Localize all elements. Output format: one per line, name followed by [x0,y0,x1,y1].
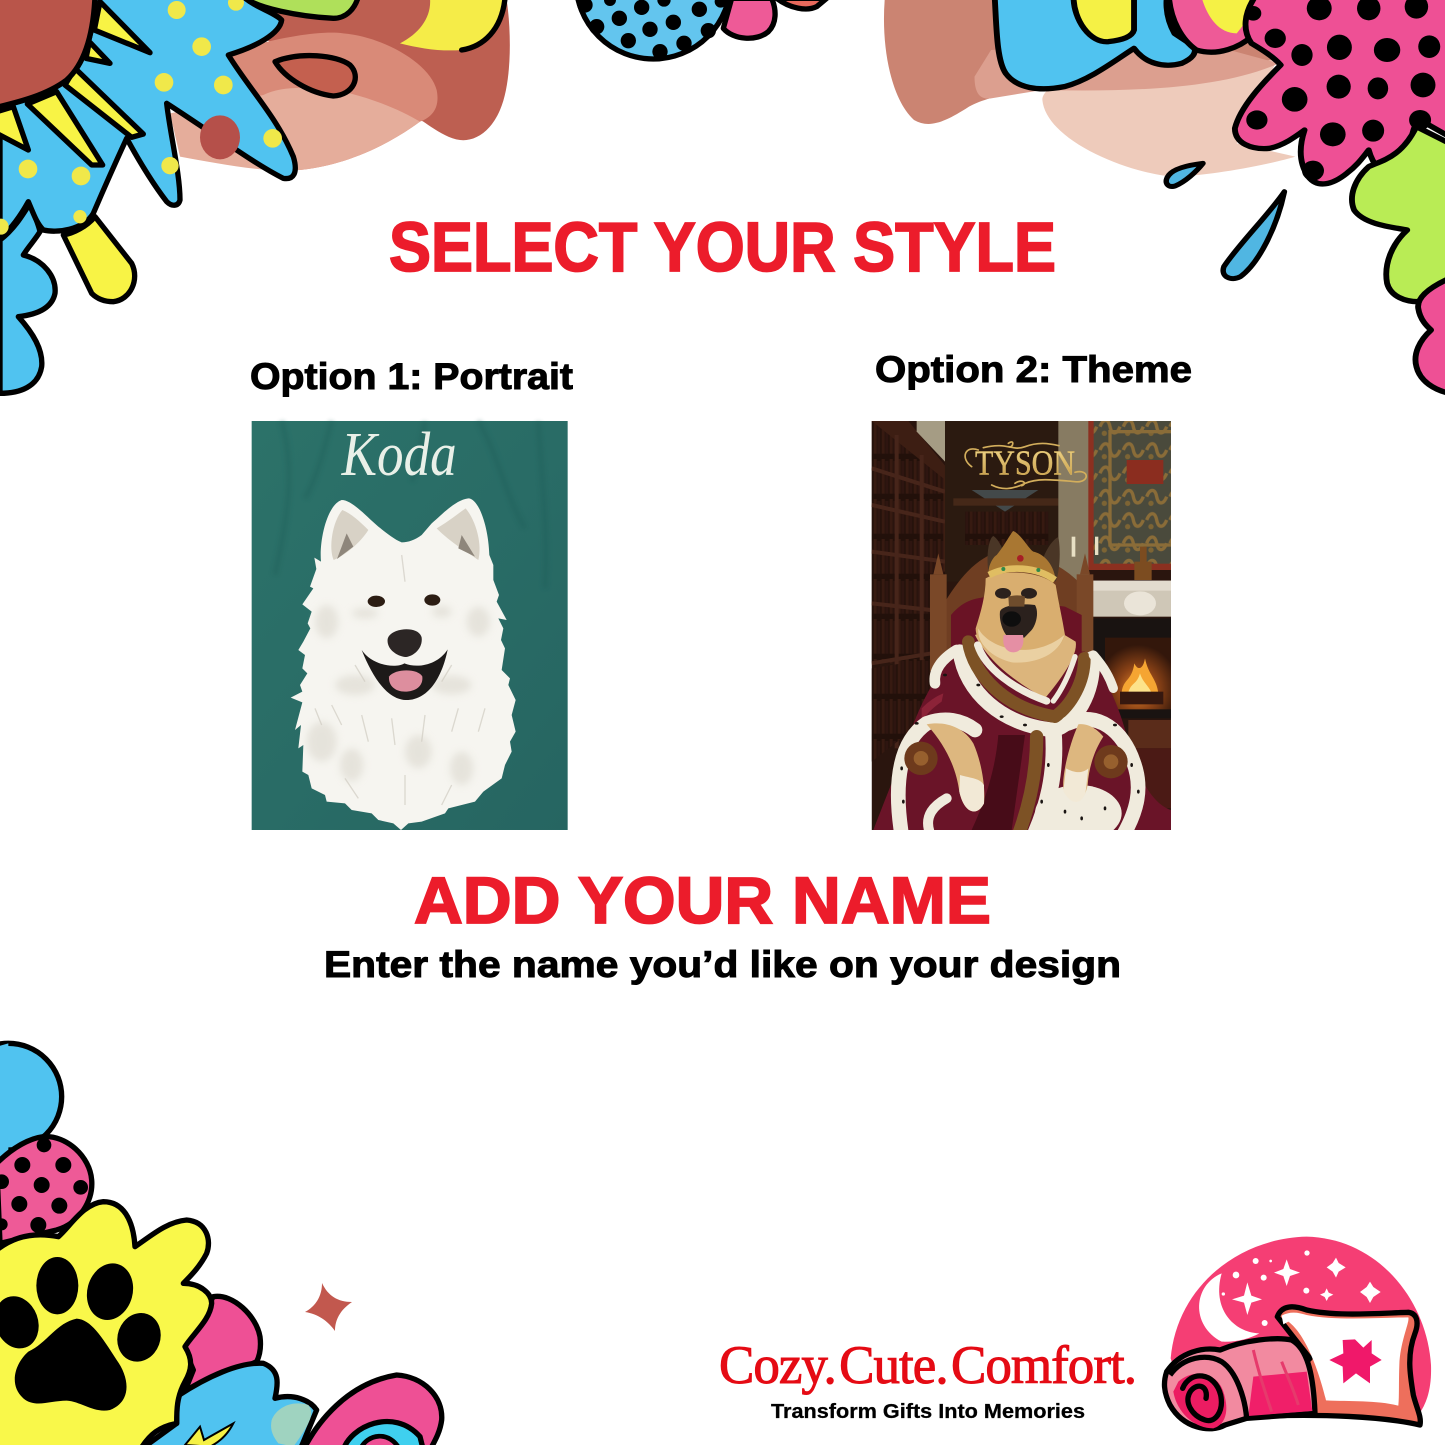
left bookshelf [872,421,950,762]
fireplace [1093,618,1171,718]
icon: paw print [0,1257,167,1411]
ermine ball [1035,786,1122,830]
tapestry [1088,421,1173,570]
decoration: top centre polka-dot circle [576,0,827,59]
heading: add your name: ADD YOUR NAME [414,863,991,937]
gold flourishes [965,442,1086,489]
stone wall [1058,421,1089,582]
heading: option 1: Option 1: Portrait [250,356,573,397]
blanket roll [1164,1339,1315,1429]
script name: Koda: Koda [341,421,457,489]
decoration: top-left paint splat [0,0,510,393]
throne [930,548,1093,671]
candles [1072,537,1075,557]
ermine spots [900,674,1140,820]
ermine and gold trim [898,642,1138,835]
neck fur [975,634,1076,697]
instruction text: Enter the name you’d like on your design [324,944,1121,985]
dog: German shepherd head [976,536,1065,663]
title: SELECT YOUR STYLE [389,208,1056,286]
panel: Koda portrait blanket [252,421,568,830]
crown [989,531,1056,580]
mantel [1092,581,1171,617]
decoration: top-right paint splat [884,0,1445,393]
pillow [1250,1307,1420,1425]
icon: sparkle star [305,1283,352,1331]
gold name: TYSON: TYSON [975,444,1075,482]
logo icon: blanket and pillow under night sky [1164,1237,1431,1429]
logo: tagline: Transform Gifts Into Memories [771,1401,1085,1423]
eyes [368,596,385,607]
dog: Samoyed [291,498,516,830]
mouth [362,649,448,700]
nose [388,629,422,657]
decoration: bottom-left paw splat [0,1043,442,1445]
ornament on mantel [1134,547,1152,580]
front legs [927,723,984,812]
logo: slogan: Cozy. Cute. Comfort. [719,1335,1136,1395]
back shelf [945,466,950,572]
heading: option 2: Option 2: Theme [875,349,1192,390]
ears [331,510,368,560]
robe [873,648,1171,830]
panel: Tyson royal theme blanket [872,421,1173,842]
arm rests [904,742,938,775]
